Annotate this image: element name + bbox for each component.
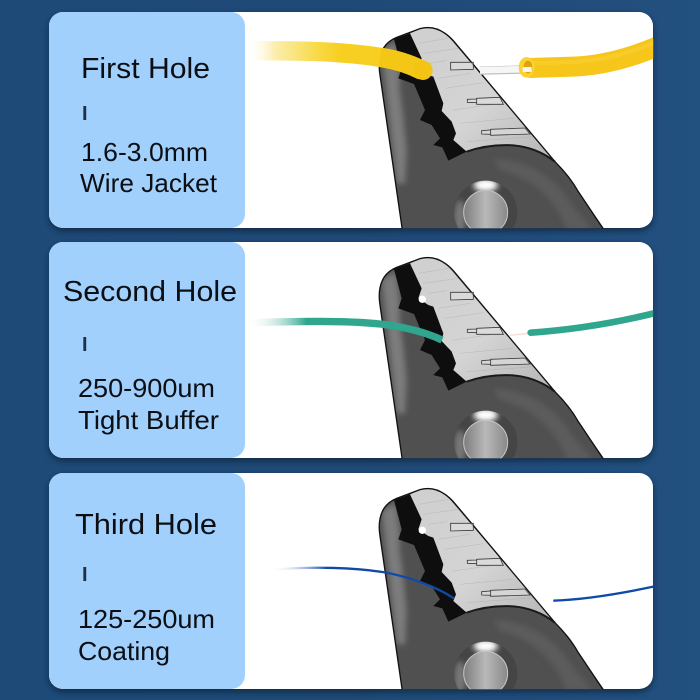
second hole white card (49, 242, 653, 458)
second hole size: 250-900um (78, 373, 215, 403)
first hole layer name: Wire Jacket (80, 168, 218, 198)
stripper tool and blue coated fiber (270, 484, 653, 700)
second hole layer name: Tight Buffer (78, 405, 219, 435)
third hole blue label card (49, 473, 245, 689)
third hole size: 125-250um (78, 604, 215, 634)
second hole heading: Second Hole (63, 276, 237, 308)
third hole heading: Third Hole (75, 509, 217, 541)
panel: third hole (49, 473, 653, 700)
first hole blue label card (49, 12, 245, 228)
third hole layer name: Coating (78, 636, 170, 666)
first hole separator mark: I (82, 103, 88, 125)
first hole white card (49, 12, 653, 228)
first hole heading: First Hole (81, 53, 210, 85)
first hole size: 1.6-3.0mm (81, 137, 208, 167)
panel: first hole (49, 12, 657, 244)
second hole separator mark: I (82, 334, 88, 356)
third hole white card (49, 473, 653, 689)
second hole blue label card (49, 242, 245, 458)
third hole separator mark: I (82, 564, 88, 586)
panel: second hole (49, 242, 657, 474)
stripper tool and yellow jacket cable (256, 26, 654, 228)
stripper tool and green buffer cable (258, 256, 654, 458)
